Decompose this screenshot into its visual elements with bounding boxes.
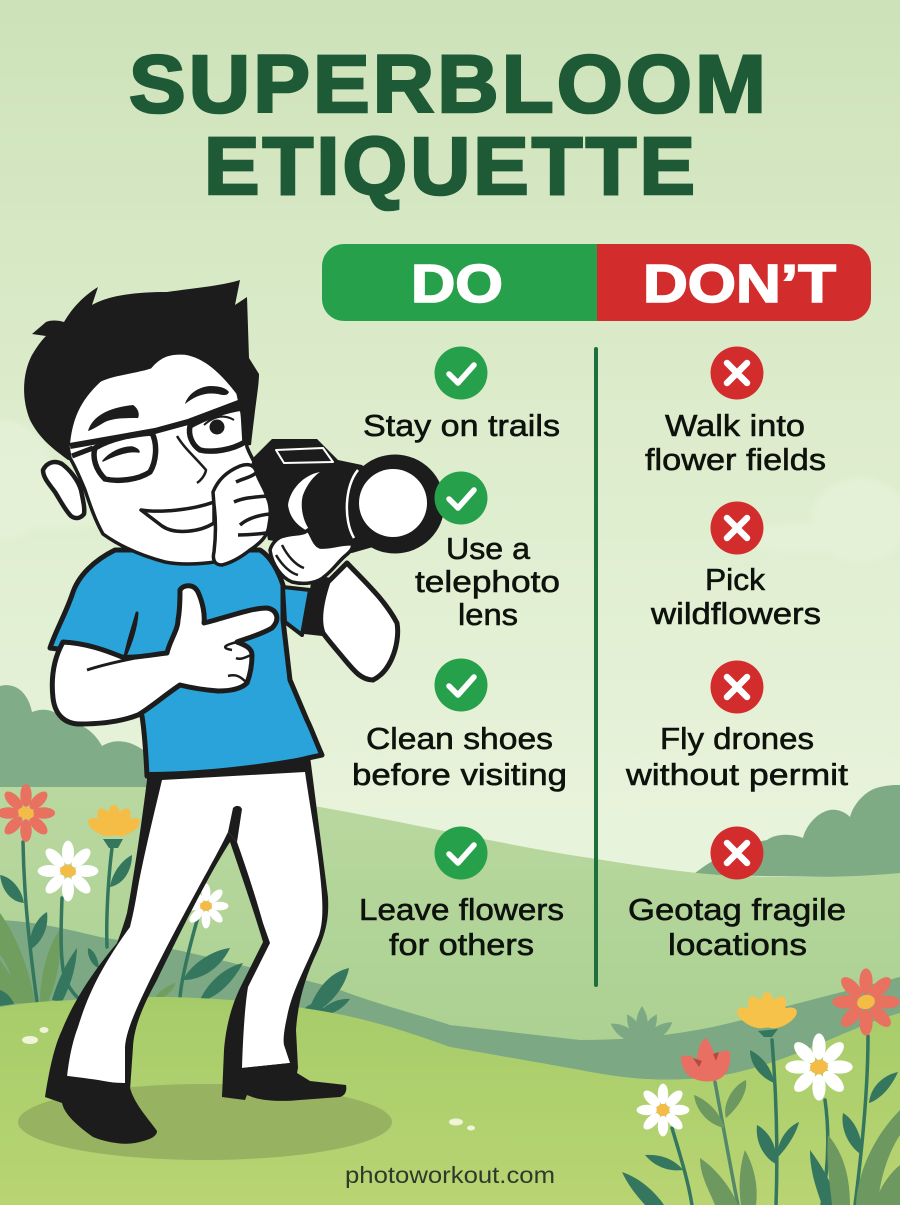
don't item: pick wildflowers: wildflowers — [650, 596, 821, 631]
bush right — [693, 785, 900, 878]
don't item: fly drones — [625, 660, 848, 792]
flower: red daisy right — [832, 968, 900, 1036]
hair — [24, 280, 259, 460]
don't item: geotag — [628, 826, 846, 962]
left arm and pointing hand — [52, 586, 277, 724]
bush left — [0, 685, 150, 790]
glasses — [70, 402, 245, 480]
flower: small white daisy — [184, 884, 228, 928]
eyebrows — [88, 386, 229, 431]
flower: red tulip — [681, 1038, 730, 1081]
sleeve crease — [125, 613, 137, 656]
flower: red daisy — [0, 784, 55, 842]
do item: stay on trails: Stay on trails — [363, 408, 560, 443]
foreground ground — [0, 997, 900, 1205]
don't item: walk into flower fields: Walk into — [665, 408, 805, 443]
do item: telephoto lens — [415, 472, 560, 632]
do item: leave flowers — [359, 826, 564, 962]
do / don't header: DON’T — [643, 254, 836, 314]
don't item: geotag: locations — [668, 927, 807, 962]
mid hill — [0, 787, 900, 1100]
do item: clean shoes — [352, 658, 567, 792]
ground shadow — [18, 1084, 392, 1160]
photographer character — [24, 280, 444, 1144]
hand on camera — [213, 465, 270, 565]
don't item: walk into flower fields — [645, 346, 826, 477]
title — [129, 39, 769, 212]
divider — [594, 347, 598, 987]
right shoe — [222, 1063, 346, 1101]
shirt — [50, 550, 322, 776]
do / don't header — [322, 244, 871, 321]
do item: telephoto lens: telephoto — [415, 564, 560, 599]
flower: yellow tulip — [85, 805, 143, 848]
shirt hem — [145, 756, 309, 778]
do item: leave flowers: Leave flowers — [359, 892, 564, 927]
do item: clean shoes: Clean shoes — [366, 721, 553, 756]
darker back band — [0, 920, 900, 1080]
don't item: pick wildflowers — [650, 502, 821, 631]
flower: yellow tulip right — [734, 992, 800, 1037]
ground pebbles — [22, 1027, 475, 1130]
leaves right — [622, 1050, 898, 1205]
title: SUPERBLOOM — [129, 39, 769, 130]
do item: clean shoes: before visiting — [352, 757, 567, 792]
stems — [23, 842, 198, 1002]
ear — [43, 462, 84, 518]
don't item: pick wildflowers: Pick — [705, 562, 765, 597]
stems right — [672, 1036, 868, 1205]
grass blades left — [0, 913, 176, 1003]
do item: telephoto lens: lens — [458, 597, 518, 632]
face — [68, 353, 254, 564]
fingers — [234, 473, 270, 535]
small plant on right hill — [608, 1006, 675, 1047]
clouds — [0, 420, 900, 562]
trousers — [45, 756, 328, 1097]
do item: leave flowers: for others — [389, 927, 534, 962]
palm lines — [276, 545, 304, 575]
hand under camera — [270, 530, 353, 583]
flower: white daisy — [38, 841, 98, 901]
flower: small white daisy right — [637, 1084, 689, 1136]
do item: stay on trails — [363, 346, 560, 443]
don't item: fly drones: Fly drones — [660, 721, 814, 756]
don't item: geotag: Geotag fragile — [628, 892, 846, 927]
nose — [177, 436, 206, 483]
left shoe — [45, 1075, 157, 1144]
small plant behind right leg — [300, 968, 350, 1016]
do / don't header: DO — [411, 254, 503, 314]
right flowers — [622, 968, 900, 1205]
flower: white daisy right — [785, 1033, 853, 1101]
camera — [253, 439, 444, 554]
right forearm — [321, 563, 398, 680]
don't item: walk into flower fields: flower fields — [645, 442, 826, 477]
right sleeve — [283, 587, 310, 635]
do item: telephoto lens: Use a — [446, 531, 531, 566]
website footer: photoworkout.com — [345, 1162, 555, 1188]
don't item: fly drones: without permit — [625, 757, 848, 792]
left grass and flowers — [0, 784, 243, 1006]
open eye — [204, 417, 234, 434]
smile — [141, 502, 214, 531]
arm shadow — [304, 575, 332, 636]
winking eye — [103, 447, 139, 461]
title: ETIQUETTE — [204, 121, 698, 212]
